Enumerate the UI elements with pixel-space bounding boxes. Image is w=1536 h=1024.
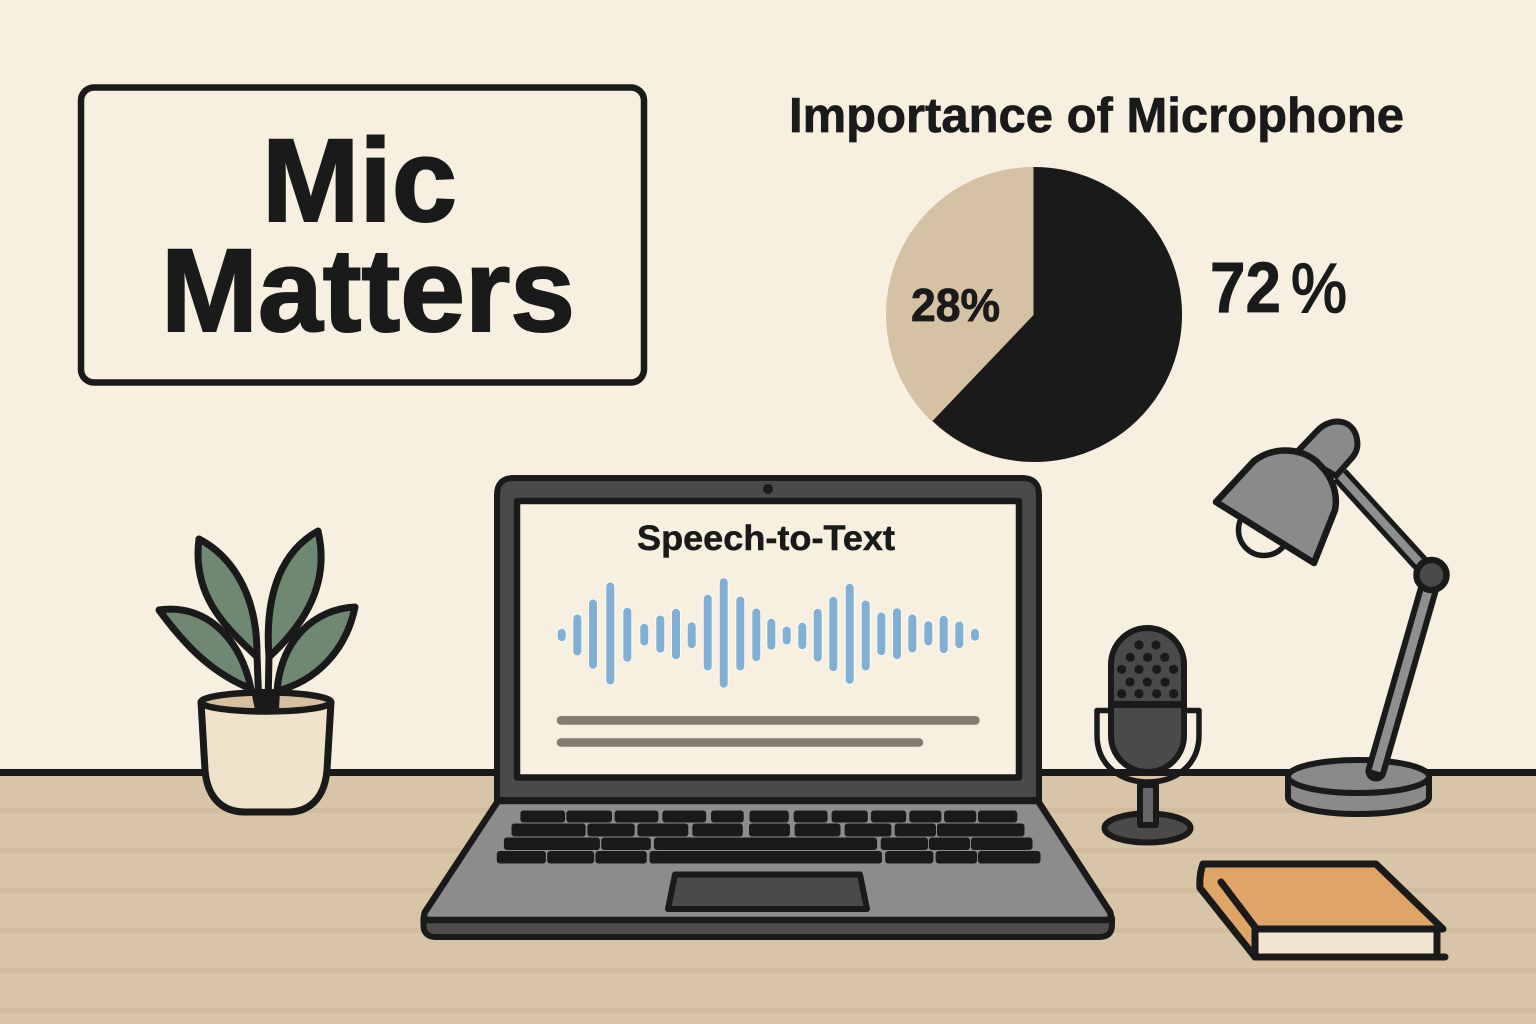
touchpad — [668, 874, 867, 909]
lamp shade — [1216, 450, 1336, 563]
stem base — [252, 690, 279, 710]
leaf: top right — [268, 531, 321, 657]
laptop hinge line — [497, 797, 1039, 802]
plant stems — [257, 655, 269, 708]
mic base — [1104, 814, 1190, 842]
waveform — [557, 578, 980, 688]
leaf: left — [159, 609, 251, 689]
chart heading: Importance of Microphone — [789, 89, 1404, 143]
mic yoke — [1097, 710, 1199, 782]
icon: potted plant — [159, 531, 355, 812]
lamp joint — [1416, 560, 1446, 590]
keyboard — [497, 810, 1040, 864]
pot rim — [201, 692, 331, 712]
mic band — [1111, 701, 1184, 708]
book pages — [1255, 929, 1437, 957]
pot body — [201, 702, 331, 812]
screen — [517, 501, 1019, 778]
book bottom edge — [1255, 954, 1445, 960]
laptop front edge — [424, 918, 1112, 937]
icon: microphone — [1097, 628, 1199, 842]
leaf: right — [277, 607, 355, 691]
screen heading: Speech-to-Text — [637, 519, 895, 558]
pie slice: 72% — [932, 167, 1182, 462]
label: 72%: % — [1291, 249, 1347, 327]
icon: laptop — [424, 478, 1112, 937]
icon: book — [1200, 864, 1445, 957]
pie chart — [886, 167, 1182, 462]
title: Mic: Mic — [262, 115, 457, 247]
transcript lines — [557, 716, 980, 747]
label: 72%: 72 — [1210, 249, 1281, 328]
laptop lid — [497, 478, 1039, 801]
panel: title box — [81, 88, 644, 382]
mic capsule — [1111, 628, 1184, 772]
lamp shade cap — [1296, 422, 1357, 476]
lamp base — [1288, 776, 1429, 814]
wall background — [0, 0, 1536, 776]
lamp bulb — [1238, 504, 1290, 556]
book spine crease — [1221, 882, 1255, 927]
lamp lower arm — [1376, 580, 1431, 771]
title: Matters: Matters — [161, 225, 575, 357]
mic stem — [1140, 785, 1156, 825]
webcam — [763, 484, 773, 494]
laptop base — [424, 801, 1111, 920]
label: 28%: 28% — [911, 279, 1000, 331]
lamp upper arm — [1340, 475, 1431, 575]
label: 72% — [1210, 249, 1347, 328]
book cover — [1200, 864, 1443, 957]
mic grille dots — [1117, 640, 1178, 698]
leaf: top left — [198, 539, 257, 657]
icon: desk lamp — [1216, 422, 1446, 814]
desk surface — [0, 769, 1536, 1024]
